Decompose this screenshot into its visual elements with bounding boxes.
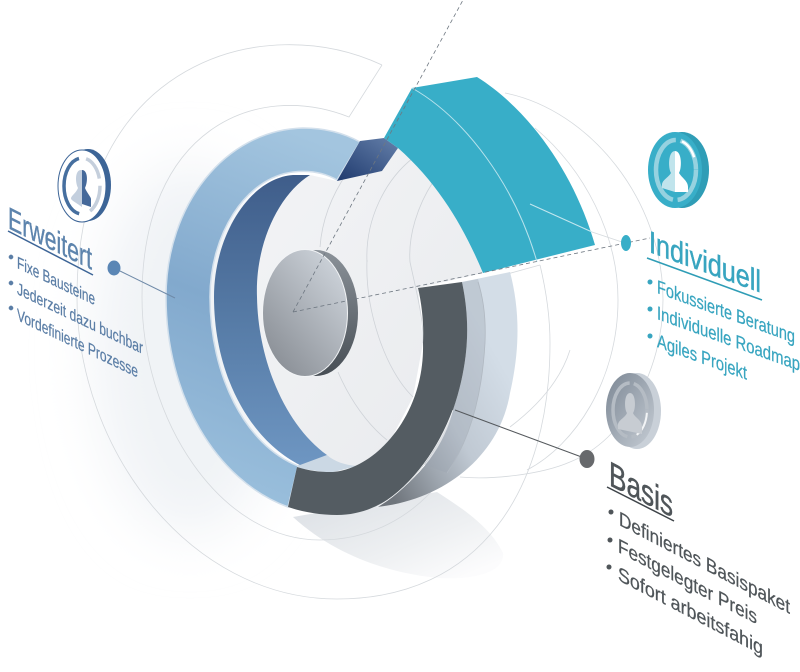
list item: Vordefinierte Prozesse [17, 305, 138, 382]
list item: Fixe Bausteine [17, 253, 95, 309]
connector lines [120, 271, 587, 459]
central disc [262, 250, 358, 376]
panel: Basis dark gray ring [288, 282, 467, 515]
ring soft shadow [95, 165, 285, 535]
list item: Jederzeit dazu buchbar [17, 279, 143, 358]
inner orbit lines over surface [320, 158, 433, 440]
list item: Sofort arbeitsfahig [618, 562, 763, 660]
dot: Erweitert [108, 260, 120, 276]
heading: Erweitert: Erweitert [8, 200, 92, 276]
panel: dark blue end cap [337, 138, 398, 181]
heading underline [647, 258, 762, 300]
panel: Individuell teal segment [384, 77, 595, 273]
dashed axes [293, 0, 650, 312]
icon: Erweitert medallion [58, 149, 111, 222]
icon: Individuell medallion [648, 132, 709, 208]
bullets [607, 510, 613, 569]
panel: pale sliver under dark blue [297, 455, 357, 473]
dot: Basis [580, 450, 594, 468]
panel: Erweitert dark blue inner wall [214, 175, 327, 465]
dot: Individuell [621, 235, 631, 251]
icon: Basis medallion [606, 373, 661, 449]
list item: Festgelegter Preis [618, 534, 757, 629]
bullets [9, 255, 13, 310]
cast shadow [293, 492, 503, 578]
panel: basis outer extrusion [377, 272, 518, 507]
heading underline [8, 231, 93, 275]
heading: Basis: Basis [609, 453, 673, 525]
text block: Basis [607, 453, 790, 660]
thin orbit lines [77, 45, 663, 599]
heading underline [607, 487, 674, 521]
panel: Erweitert light blue ring [166, 128, 360, 507]
text block: Erweitert [8, 200, 143, 382]
bullets [648, 280, 652, 338]
heading: Individuell: Individuell [649, 224, 761, 300]
panel: inner surface [257, 148, 483, 466]
text block: Individuell [647, 224, 800, 385]
list item: Agiles Projekt [657, 331, 747, 385]
